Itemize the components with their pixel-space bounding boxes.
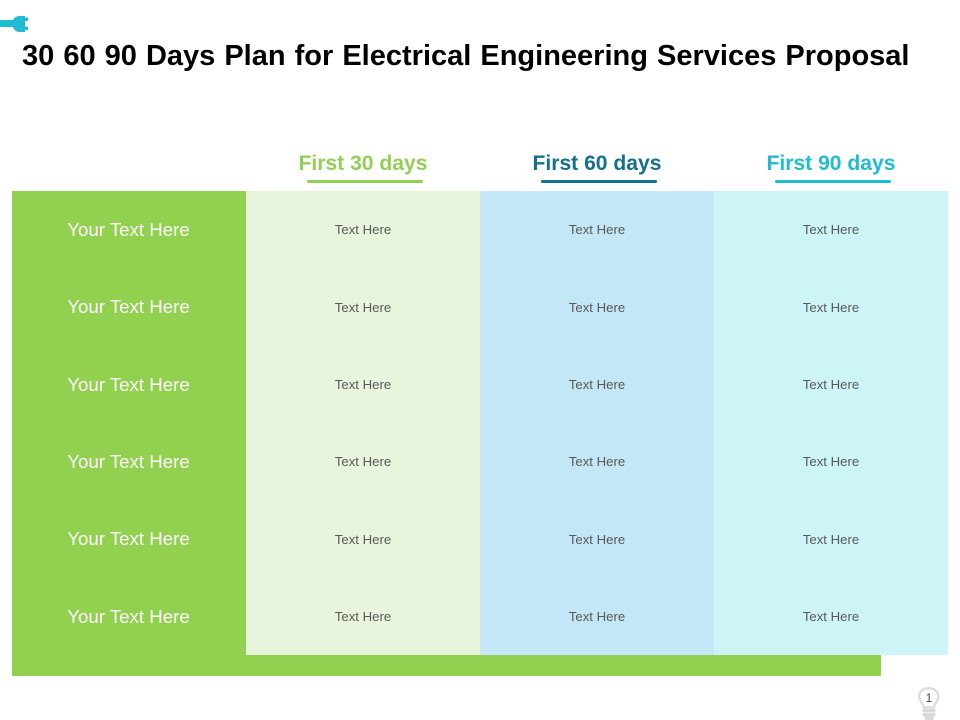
underline: first 30 days xyxy=(307,180,423,183)
icon: light bulb with page number xyxy=(918,687,940,720)
underline: first 60 days xyxy=(541,180,657,183)
panel: first 30 days column xyxy=(246,191,480,655)
panel: first 60 days column xyxy=(480,191,714,655)
cell r4 c1: Text Here xyxy=(335,454,391,469)
cell r5 c2: Text Here xyxy=(569,532,625,547)
row label 5: Your Text Here xyxy=(67,528,190,549)
cell r2 c2: Text Here xyxy=(569,300,625,315)
panel: first 90 days column xyxy=(714,191,948,655)
icon: plug xyxy=(0,16,28,32)
title: 30 60 90 Days Plan for Electrical Engineering Services Proposal xyxy=(22,40,909,72)
cell r2 c3: Text Here xyxy=(803,300,859,315)
cell r3 c2: Text Here xyxy=(569,377,625,392)
bottom green bar xyxy=(12,640,881,676)
row label 2: Your Text Here xyxy=(67,296,190,317)
cell r5 c3: Text Here xyxy=(803,532,859,547)
heading: first 90 days: First 90 days xyxy=(766,152,895,175)
cell r2 c1: Text Here xyxy=(335,300,391,315)
cell r3 c3: Text Here xyxy=(803,377,859,392)
cell r5 c1: Text Here xyxy=(335,532,391,547)
row label 4: Your Text Here xyxy=(67,451,190,472)
cell r3 c1: Text Here xyxy=(335,377,391,392)
heading: first 60 days: First 60 days xyxy=(532,152,661,175)
cell r1 c2: Text Here xyxy=(569,222,625,237)
cell r4 c3: Text Here xyxy=(803,454,859,469)
row label 1: Your Text Here xyxy=(67,219,190,240)
cell r4 c2: Text Here xyxy=(569,454,625,469)
row label panel xyxy=(12,191,246,655)
cell r6 c2: Text Here xyxy=(569,609,625,624)
row label 3: Your Text Here xyxy=(67,374,190,395)
cell r6 c1: Text Here xyxy=(335,609,391,624)
heading: first 30 days: First 30 days xyxy=(298,152,427,175)
row label 6: Your Text Here xyxy=(67,606,190,627)
cell r6 c3: Text Here xyxy=(803,609,859,624)
cell r1 c3: Text Here xyxy=(803,222,859,237)
underline: first 90 days xyxy=(775,180,891,183)
cell r1 c1: Text Here xyxy=(335,222,391,237)
icon: light bulb with page number: 1 xyxy=(926,693,932,705)
